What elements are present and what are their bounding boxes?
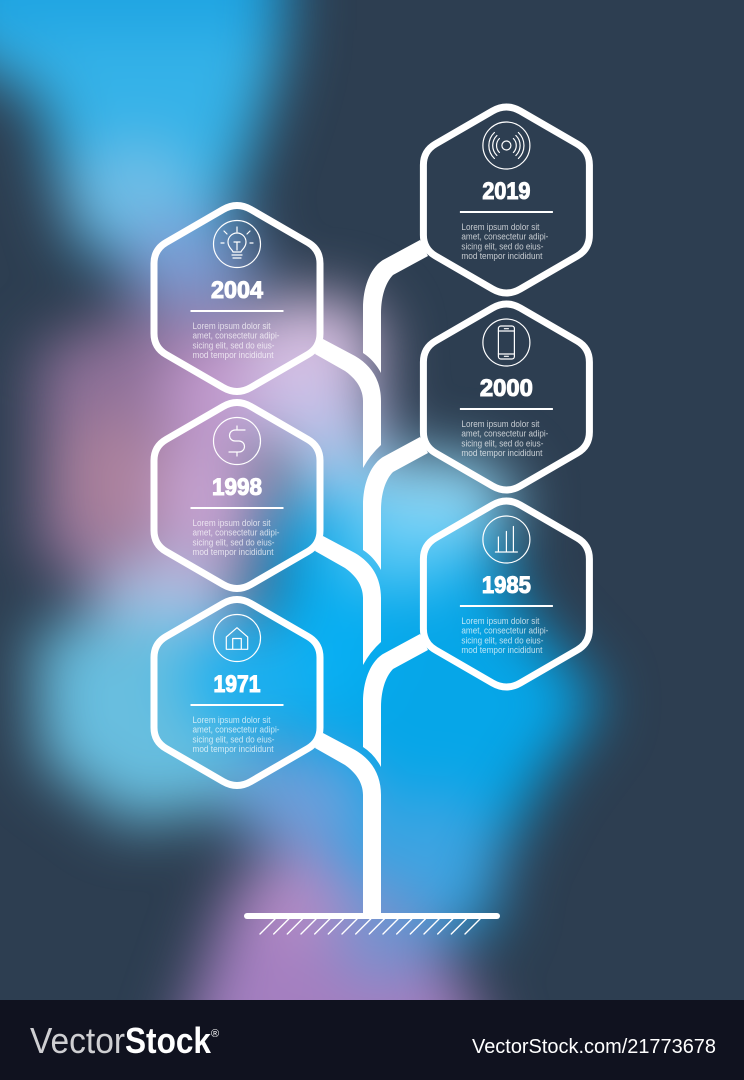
description: amet, consectetur adipi-	[192, 725, 280, 735]
footer logo: Vector	[30, 1020, 125, 1061]
description: mod tempor incididunt	[461, 645, 543, 655]
panel: 1971	[154, 600, 320, 786]
branch: 2004	[315, 339, 381, 468]
footer image id: VectorStock.com/21773678	[472, 1035, 716, 1058]
description: amet, consectetur adipi-	[192, 528, 280, 538]
branch: 2019	[363, 240, 428, 373]
icon: dollar sign	[214, 418, 260, 464]
icon: light bulb	[214, 220, 260, 268]
year: 1971	[214, 671, 260, 698]
description: mod tempor incididunt	[192, 350, 274, 360]
icon: broadcast signal	[483, 122, 530, 169]
description: sicing elit, sed do eius-	[192, 340, 275, 350]
description: mod tempor incididunt	[192, 744, 274, 754]
year: 1985	[482, 572, 531, 599]
description: amet, consectetur adipi-	[461, 232, 548, 242]
panel: 1998	[154, 402, 320, 588]
divider	[190, 704, 284, 706]
description: sicing elit, sed do eius-	[192, 734, 275, 744]
year: 2004	[211, 277, 263, 304]
year: 2000	[480, 375, 533, 402]
description: mod tempor incididunt	[192, 547, 274, 557]
description: sicing elit, sed do eius-	[461, 635, 543, 645]
divider	[460, 408, 553, 410]
ground hatching	[260, 919, 480, 934]
description: sicing elit, sed do eius-	[461, 438, 543, 448]
description: mod tempor incididunt	[461, 251, 543, 261]
footer logo	[30, 1020, 219, 1061]
divider	[190, 507, 284, 509]
ground line	[244, 913, 500, 919]
divider	[460, 605, 553, 607]
icon: smartphone	[483, 319, 530, 366]
description: Lorem ipsum dolor sit	[461, 222, 540, 232]
description: amet, consectetur adipi-	[192, 331, 280, 341]
description: Lorem ipsum dolor sit	[192, 321, 271, 331]
branch: 2000	[363, 437, 428, 570]
panel: 2004	[154, 206, 320, 392]
description: Lorem ipsum dolor sit	[461, 616, 540, 626]
description: amet, consectetur adipi-	[461, 626, 548, 636]
icon: house	[214, 614, 260, 662]
description: amet, consectetur adipi-	[461, 429, 548, 439]
panel: 1985	[423, 501, 589, 687]
description: sicing elit, sed do eius-	[192, 537, 275, 547]
year: 1998	[212, 474, 262, 501]
year: 2019	[482, 178, 530, 205]
divider	[460, 211, 553, 213]
footer logo: ®	[211, 1028, 219, 1040]
footer bar	[0, 1000, 744, 1080]
branch: 1985	[363, 634, 428, 767]
branch: 1998	[315, 536, 381, 665]
panel: 2000	[423, 304, 589, 490]
description: sicing elit, sed do eius-	[461, 241, 543, 251]
description: Lorem ipsum dolor sit	[461, 419, 540, 429]
panel: 2019	[423, 107, 589, 293]
divider	[190, 310, 284, 312]
description: mod tempor incididunt	[461, 448, 543, 458]
tree trunk and branches	[315, 240, 428, 916]
description: Lorem ipsum dolor sit	[192, 518, 271, 528]
footer logo: Stock	[125, 1020, 212, 1061]
branch and trunk: 1971	[315, 733, 381, 916]
description: Lorem ipsum dolor sit	[192, 715, 271, 725]
icon: bar chart	[483, 516, 530, 563]
